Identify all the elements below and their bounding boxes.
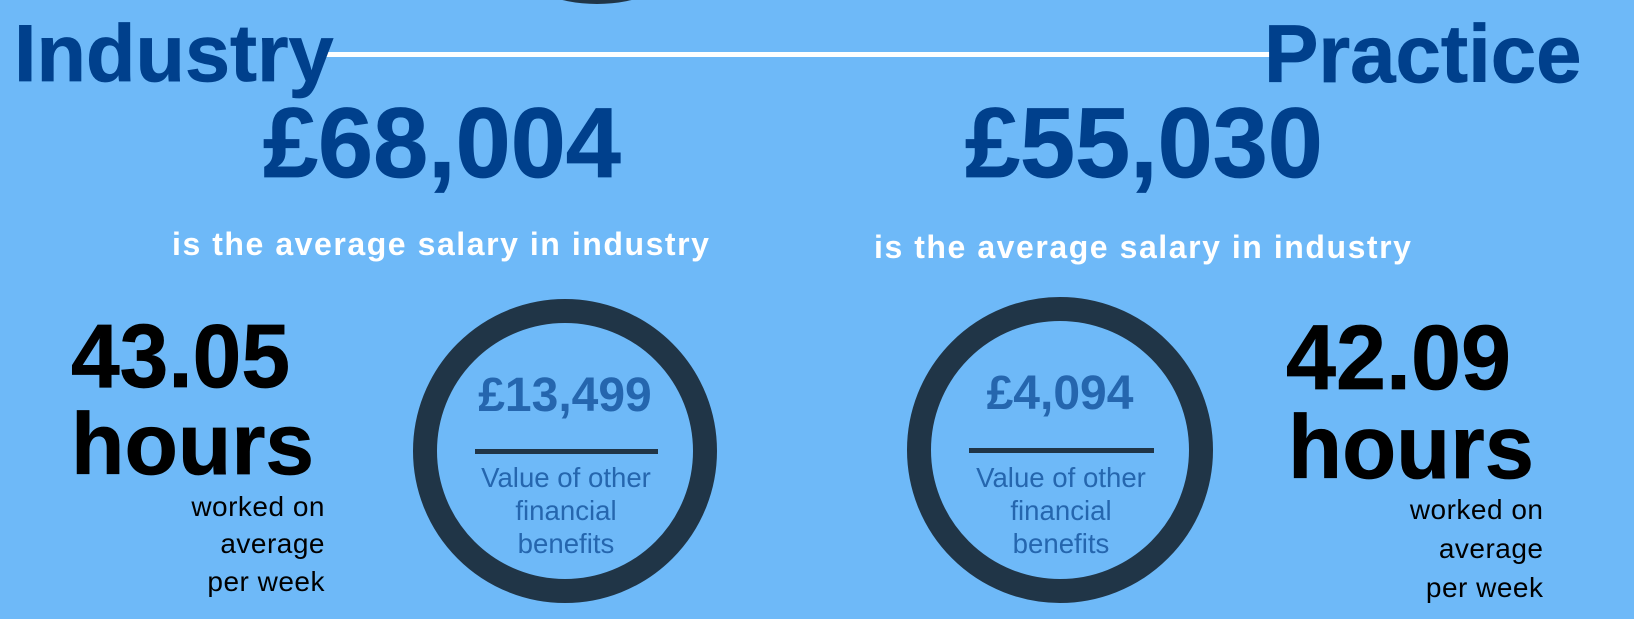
ring: other financial benefits: financial (1010, 495, 1112, 526)
ring: other financial benefits: £13,499 (478, 369, 652, 422)
hours caption (1409, 494, 1544, 603)
ring: other financial benefits: benefits (518, 528, 614, 559)
hours caption: average (220, 528, 325, 559)
hours worked figure: hours (71, 395, 314, 493)
ring: other financial benefits (425, 311, 705, 591)
hours worked figure (1286, 307, 1534, 498)
heading: Practice: Practice (1264, 9, 1582, 100)
hours caption: per week (207, 566, 325, 597)
hours caption: worked on (190, 491, 325, 522)
hours caption: per week (1426, 572, 1544, 603)
heading: Industry: Industry (14, 9, 334, 99)
hours caption: average (1439, 533, 1544, 564)
salary caption: is the average salary in industry (172, 226, 710, 262)
ring: other financial benefits: financial (515, 495, 617, 526)
hours worked figure: hours (1288, 398, 1534, 498)
hours worked figure (71, 307, 314, 493)
average salary figure: £68,004 (263, 87, 621, 198)
panel: practice (874, 9, 1582, 603)
top circle fragment (445, 0, 749, 4)
average salary figure: £55,030 (965, 87, 1323, 198)
hours caption (190, 491, 325, 597)
ring: other financial benefits: £4,094 (987, 367, 1134, 420)
salary caption: is the average salary in industry (874, 229, 1412, 265)
panel: industry (14, 9, 710, 597)
hours worked figure: 43.05 (71, 307, 290, 407)
hours worked figure: 42.09 (1286, 307, 1511, 409)
ring: other financial benefits (919, 309, 1201, 591)
ring: other financial benefits: Value of other (481, 462, 651, 493)
ring: other financial benefits: Value of other (976, 462, 1146, 493)
connector line between headings (325, 52, 1270, 57)
hours caption: worked on (1409, 494, 1544, 525)
ring: other financial benefits: benefits (1013, 528, 1109, 559)
